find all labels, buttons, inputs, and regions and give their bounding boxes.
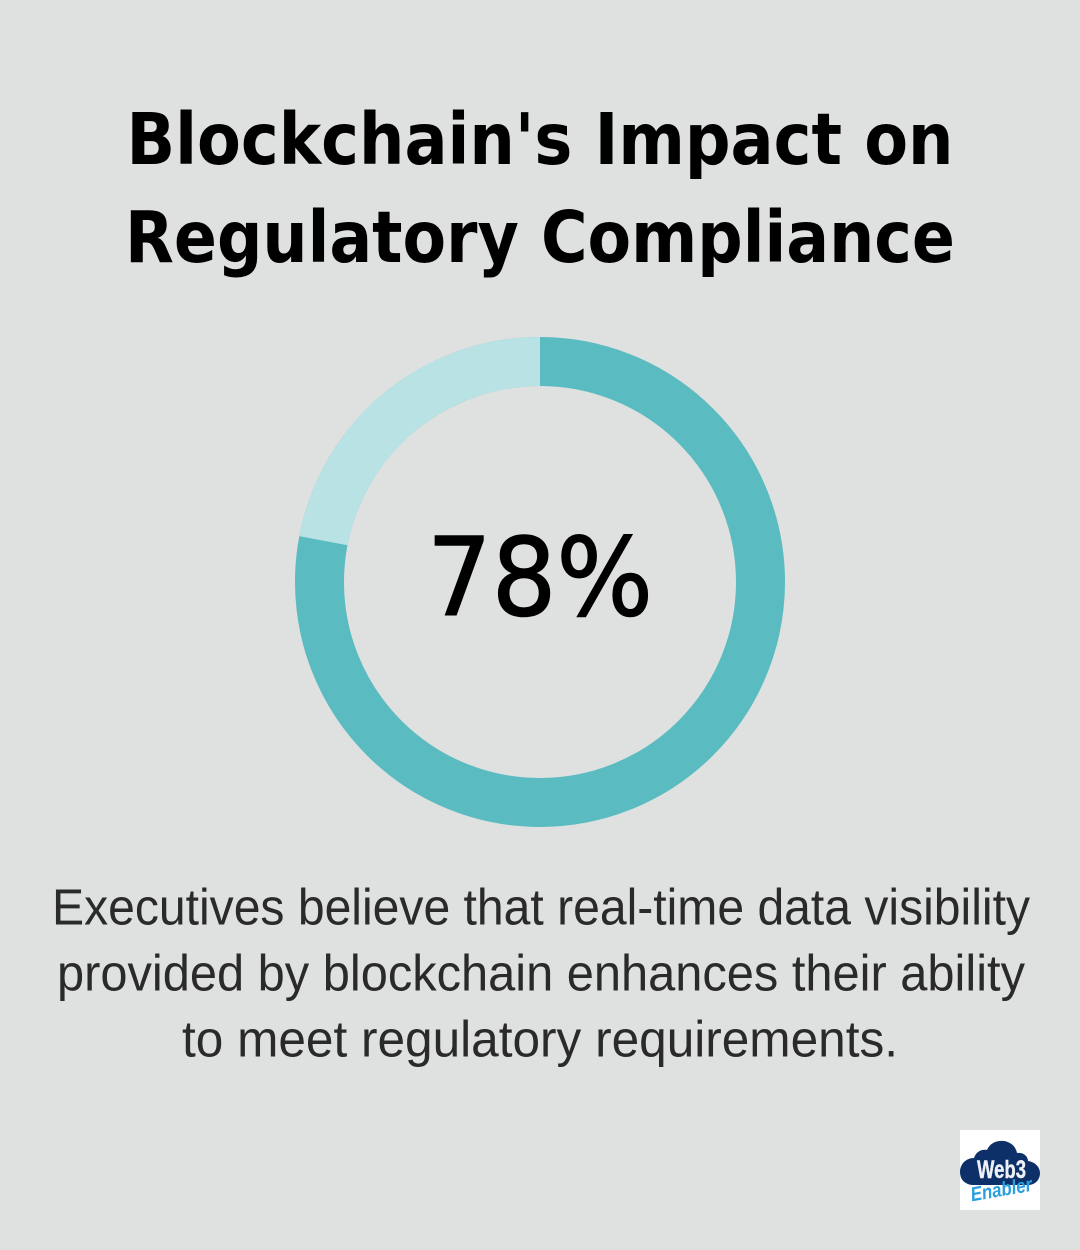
icon: cloud (960, 1141, 1040, 1185)
title: Regulatory Compliance (125, 196, 955, 279)
description text (52, 878, 1030, 1068)
logo script: Enabler (969, 1174, 1035, 1206)
logo: Web3 Enabler (960, 1130, 1040, 1210)
donut value: 78% (427, 516, 653, 641)
logo wordmark: Web3 (977, 1156, 1026, 1184)
title: Blockchain's Impact on (126, 98, 954, 181)
description text: to meet regulatory requirements. (182, 1010, 898, 1068)
title (125, 98, 955, 279)
description text: provided by blockchain enhances their ability (57, 944, 1025, 1002)
description text: Executives believe that real-time data visibility (52, 878, 1030, 936)
donut chart: 78% (320, 362, 760, 802)
